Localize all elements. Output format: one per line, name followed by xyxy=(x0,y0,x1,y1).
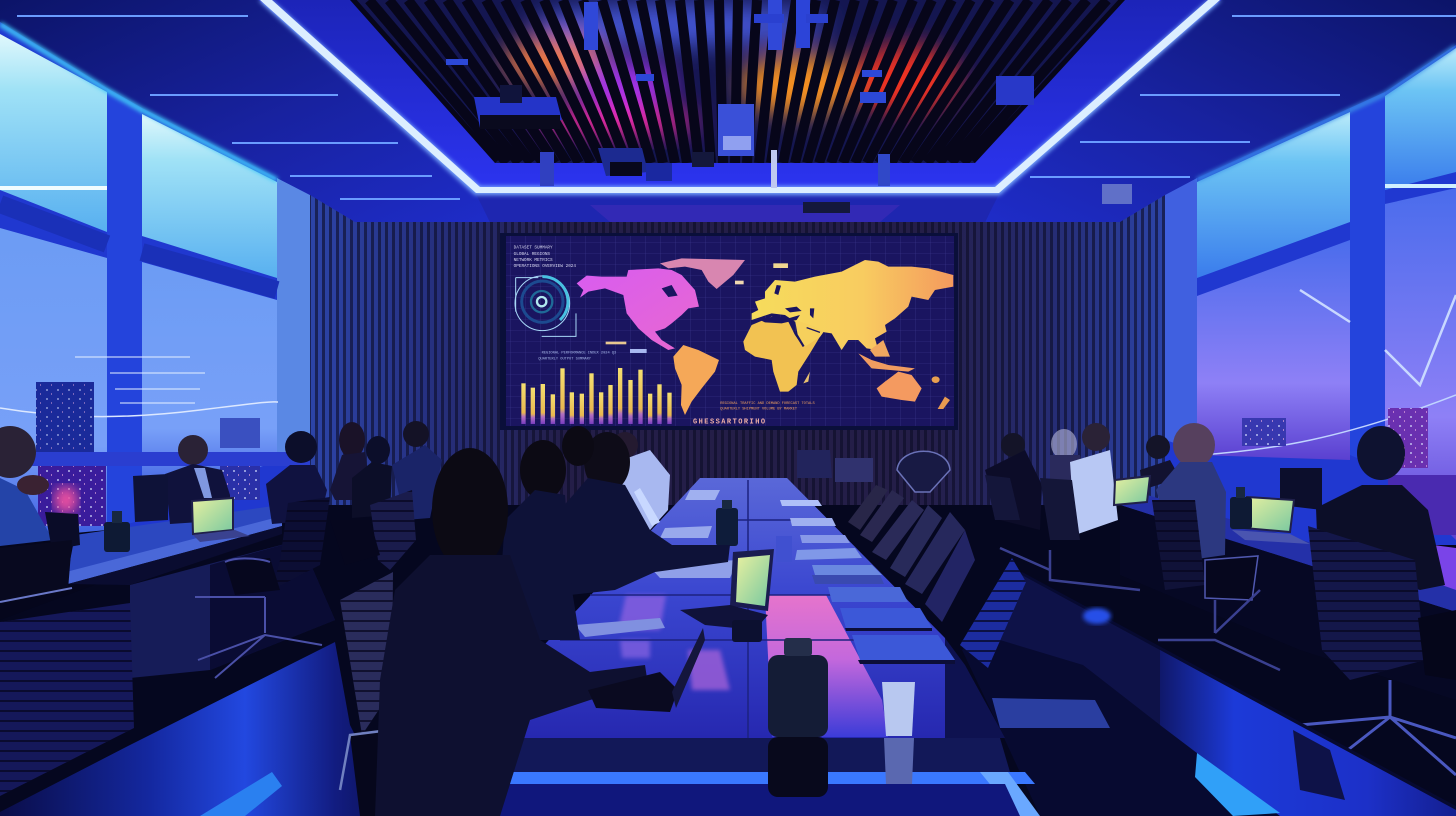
world map xyxy=(514,245,953,426)
screen heading text: GHESSARTORIHO xyxy=(693,418,767,426)
person: man in white shirt xyxy=(1070,423,1118,535)
africa xyxy=(743,317,820,392)
right window wall xyxy=(1165,45,1456,545)
person: man in dark suit at right xyxy=(1316,426,1445,590)
south america xyxy=(673,345,719,415)
window transom xyxy=(0,204,277,290)
screen heading text: OPERATIONS OVERVIEW 2024 xyxy=(514,264,576,269)
papers and notebooks on table xyxy=(575,490,955,664)
right bottle xyxy=(1230,487,1252,529)
cup on table xyxy=(776,536,792,562)
screen heading text: NETWORK METRICS xyxy=(514,258,553,263)
central table surface xyxy=(480,478,945,738)
screen heading text: GLOBAL REGIONS xyxy=(514,252,550,257)
screen heading text: DATASET SUMMARY xyxy=(514,245,553,250)
table bottle far xyxy=(716,500,738,546)
north america xyxy=(577,268,699,350)
hudson bay xyxy=(662,285,678,297)
LED light strip xyxy=(258,0,1222,195)
arabia xyxy=(795,320,823,347)
person: far-left man xyxy=(0,426,53,546)
radar dial xyxy=(515,276,576,336)
bar chart xyxy=(521,368,672,424)
lower glass panels xyxy=(0,228,107,540)
left side table xyxy=(66,505,335,678)
left window wall xyxy=(0,20,310,540)
lower glass panels xyxy=(1197,240,1350,460)
left ceiling panel xyxy=(0,0,490,222)
screen heading text: QUARTERLY SHIPMENT VOLUME BY MARKET xyxy=(720,407,798,411)
person: group along left table xyxy=(266,421,442,524)
left group of seated people xyxy=(0,421,442,546)
foreground paper cup xyxy=(882,682,915,784)
left foreground table xyxy=(0,642,395,816)
slatted back wall xyxy=(310,195,1165,510)
screen heading text: REGIONAL PERFORMANCE INDEX 2024 Q3 xyxy=(542,351,616,355)
right laptops xyxy=(1114,476,1310,544)
eurasia xyxy=(752,260,953,350)
person: man in dark suit with arm on table xyxy=(555,432,730,595)
far left foreground chair xyxy=(0,603,134,796)
screen heading text xyxy=(514,245,815,426)
madagascar xyxy=(803,372,810,383)
floor xyxy=(0,505,1456,816)
center laptop xyxy=(680,549,774,642)
left laptop xyxy=(192,498,250,542)
back chairs xyxy=(797,450,950,492)
australia xyxy=(877,372,922,402)
screen heading text: QUARTERLY OUTPUT SUMMARY xyxy=(538,357,592,361)
foreground bottle xyxy=(768,638,828,797)
chairs along table right side xyxy=(848,485,1026,668)
right side table xyxy=(1120,490,1456,700)
southeast asia islands xyxy=(858,353,915,372)
upper glass panels xyxy=(1197,112,1350,278)
right group of seated people xyxy=(985,423,1445,590)
person: background men xyxy=(985,429,1180,530)
screen heading text: REGIONAL TRAFFIC AND DEMAND FORECAST TOTALS xyxy=(720,402,815,406)
person: woman with laptop xyxy=(1156,423,1226,560)
tablet on dark table xyxy=(992,698,1110,728)
slatted ceiling with projected glow xyxy=(350,0,1125,163)
person: man in white shirt xyxy=(612,432,670,530)
right foreground black table xyxy=(962,572,1456,816)
person: man in foreground suit xyxy=(500,426,594,640)
right side chairs xyxy=(985,468,1456,775)
ceiling beam xyxy=(258,0,1222,190)
ceiling projectors xyxy=(446,0,1132,204)
foreground woman with laptop keyboard xyxy=(375,448,705,816)
wall screen xyxy=(500,233,958,430)
person: man in suit xyxy=(165,435,230,524)
left side chairs xyxy=(0,474,416,678)
table front edge xyxy=(395,638,1040,816)
left bottle xyxy=(104,511,130,552)
inland seas xyxy=(758,285,814,323)
left foreground chair xyxy=(340,572,468,816)
soffit underside xyxy=(475,192,1000,222)
right ceiling panel xyxy=(985,0,1456,222)
center-left seated men xyxy=(500,426,730,640)
greenland xyxy=(660,258,745,289)
upper glass panels xyxy=(0,34,107,232)
night skyline xyxy=(36,382,94,454)
